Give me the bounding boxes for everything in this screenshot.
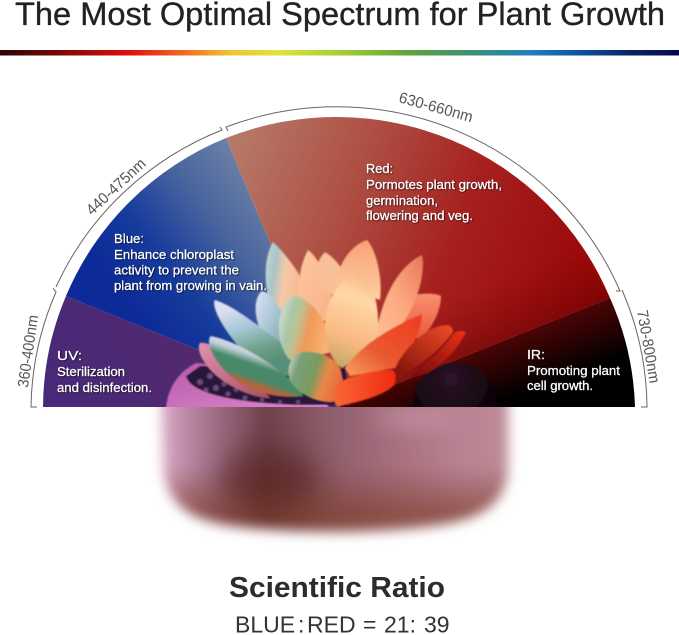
wavelength brackets (31, 107, 647, 407)
description: IR: Promoting plant (527, 363, 620, 378)
wavelength label: 630-660nm: 630-660nm (397, 89, 475, 126)
centre green-orange petal (279, 296, 332, 362)
bracket: red (226, 107, 620, 291)
wavelength label: 440-475nm: 440-475nm (83, 155, 150, 219)
description: blue: Blue: (114, 231, 144, 246)
description: blue: Enhance chloroplast (114, 247, 234, 262)
heading: scientific ratio: Scientific Ratio (229, 572, 445, 604)
description: blue: plant from growing in vain. (114, 278, 267, 293)
description: UV: UV: (57, 348, 82, 363)
description: red (366, 161, 502, 223)
sector: UV (43, 296, 339, 407)
description: UV: and disinfection. (57, 380, 152, 395)
sector: blue (66, 138, 339, 407)
pink back petal (199, 343, 270, 398)
description: red: flowering and veg. (366, 208, 473, 223)
soil speckle (197, 373, 300, 404)
description: UV (57, 348, 152, 395)
description: red: Pormotes plant growth, (366, 177, 502, 192)
succulent plant in pot (165, 240, 496, 407)
upper centre petal (336, 240, 381, 300)
pot rim (166, 363, 330, 408)
long blue-green petal (214, 300, 292, 376)
sector: IR (339, 298, 635, 407)
red centre petal (345, 314, 422, 376)
bracket: blue (56, 127, 222, 287)
wavelength label: 360-400nm: 360-400nm (15, 314, 42, 389)
outer red petal (410, 331, 466, 378)
description: IR: IR: (527, 347, 545, 362)
small white-blue petal (254, 290, 282, 342)
wavelength label: 730-800nm: 730-800nm (633, 309, 663, 385)
back peach petal (299, 250, 335, 322)
description: red: Red: (366, 161, 393, 176)
pot soil (186, 365, 350, 405)
bracket: UV (31, 288, 56, 407)
blurred pot base (161, 390, 508, 532)
back peach petal 2 (318, 252, 341, 296)
description: blue: activity to prevent the (114, 262, 239, 278)
rainbow spectrum bar (0, 50, 679, 56)
red sector lower shading (339, 205, 610, 407)
big pale centre petal (325, 270, 378, 368)
description: IR: cell growth. (527, 378, 593, 393)
sector: red (226, 117, 610, 407)
description: blue (114, 231, 267, 293)
bracket: IR (622, 290, 647, 407)
dark pot side (412, 362, 496, 407)
rear right petal (403, 292, 442, 339)
lower green-orange petal (289, 352, 346, 402)
tall right petal (376, 255, 423, 345)
dark red petal (392, 325, 453, 376)
description: IR (527, 347, 620, 393)
semicircle spectrum diagram (43, 117, 635, 407)
long lower petal (209, 336, 303, 397)
bottom red petal (333, 370, 396, 406)
description: red: germination, (366, 193, 438, 208)
back petal (264, 242, 300, 312)
description: UV: Sterilization (57, 364, 125, 379)
